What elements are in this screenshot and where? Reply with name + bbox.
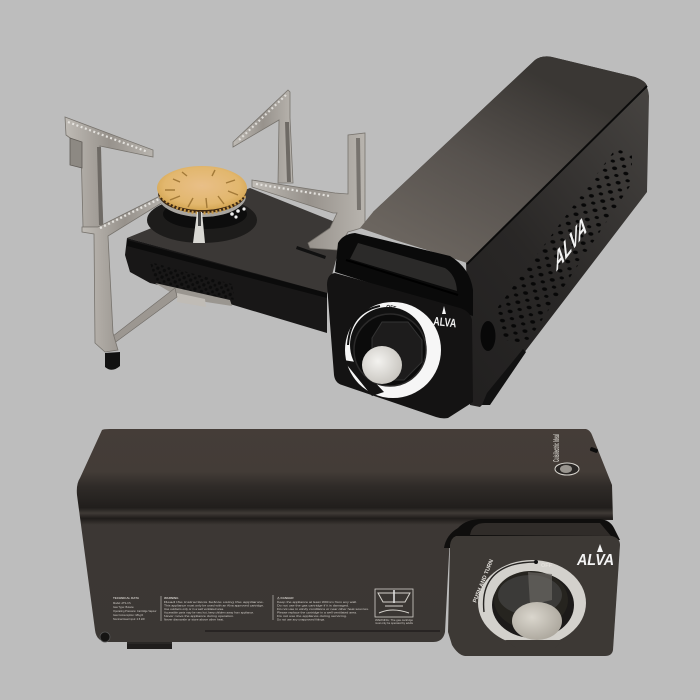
bottom stove: technical data labels: Gas Type: Butane: [113, 605, 134, 609]
bottom stove: technical data labels: Please replace the cartridge in a well ventilated area.: [277, 610, 357, 614]
OFF label: OFF: [541, 563, 553, 569]
bottom stove: technical data labels: Never dismantle or store above other heat.: [164, 618, 224, 622]
bottom stove: technical data labels: Keep the appliance at least 300mm from any wall.: [277, 600, 357, 604]
dial ring: [343, 302, 441, 398]
ALVA side logo: ALVA: [554, 209, 587, 278]
bottom stove: technical data labels: [113, 595, 369, 622]
bottom stove: technical data labels: TECHNICAL DATA: [113, 596, 140, 600]
bottom stove: technical data labels: ⚠ DANGER: [277, 596, 294, 600]
ALVA panel logo: [433, 306, 457, 330]
bottom stove: technical data labels: Nominal Heat Input: 2.5 kW: [113, 617, 145, 621]
top stove: left pot support: [65, 117, 153, 227]
knob: [494, 571, 568, 640]
top stove: right pot support: [252, 133, 365, 250]
top stove: handle: [335, 233, 473, 316]
bottom stove: control panel: [444, 519, 620, 656]
bottom stove: details: [100, 447, 598, 649]
top stove: burner: [147, 166, 257, 243]
product photo composite: Cuisilectric Ideal: [552, 434, 561, 462]
bottom stove: technical data labels: WARNING: [164, 596, 179, 600]
bottom stove: technical data labels: Use outdoors only or in a well ventilated area.: [164, 607, 224, 611]
bottom stove: technical data labels: Never move the appliance during operation.: [164, 614, 234, 618]
bottom stove: technical data labels: Operating Pressure: Cartridge Vapour: [113, 609, 157, 613]
dial ring: [478, 560, 586, 648]
bottom stove: technical data labels: Gas Consumption: 181g/h: [113, 613, 144, 617]
bottom stove: body: [77, 429, 613, 642]
top stove: rear pot support: [233, 90, 293, 183]
top stove: control panel: [327, 273, 473, 418]
top stove: cartridge case: [360, 56, 649, 407]
bottom stove: technical data labels: Do not use in windy conditions or near other heat sources.: [277, 607, 369, 611]
ALVA panel logo: ALVA: [433, 314, 457, 330]
bottom stove: technical data labels: Do not use the gas cartridge if it is damaged.: [277, 604, 349, 608]
ALVA panel logo: [576, 544, 614, 569]
bottom stove: technical data labels: This appliance must only be used with an Alva approved cartridge.: [164, 604, 264, 608]
bottom stove: technical data labels: Do not use any unapproved fittings.: [277, 618, 325, 622]
OFF label: OFF: [386, 304, 397, 312]
bottom stove: warning diagram: must only be operated by adults: [375, 621, 414, 625]
knob: [354, 314, 426, 386]
top stove: brace and leg: [82, 192, 177, 370]
bottom stove: warning diagram: WARNING: The gas cartridge: [375, 618, 414, 622]
ALVA panel logo: ALVA: [576, 552, 614, 569]
bottom stove: technical data labels: Model: ATS-CS: [113, 601, 131, 605]
top stove: burner base body: [125, 188, 345, 333]
bottom stove: technical data labels: Read the instructions before using the appliance.: [164, 600, 264, 604]
PUSH AND TURN label: PUSH AND TURN: [472, 559, 495, 604]
bottom stove: technical data labels: Accessible parts may be very hot, keep children away from appliance.: [164, 610, 254, 614]
bottom stove: warning diagram: [375, 589, 414, 625]
LOW label: LOW: [491, 625, 504, 637]
bottom stove: technical data labels: Do not use the appliance during servicing.: [277, 614, 347, 618]
bottom stove: certification logo and label: [552, 434, 579, 475]
